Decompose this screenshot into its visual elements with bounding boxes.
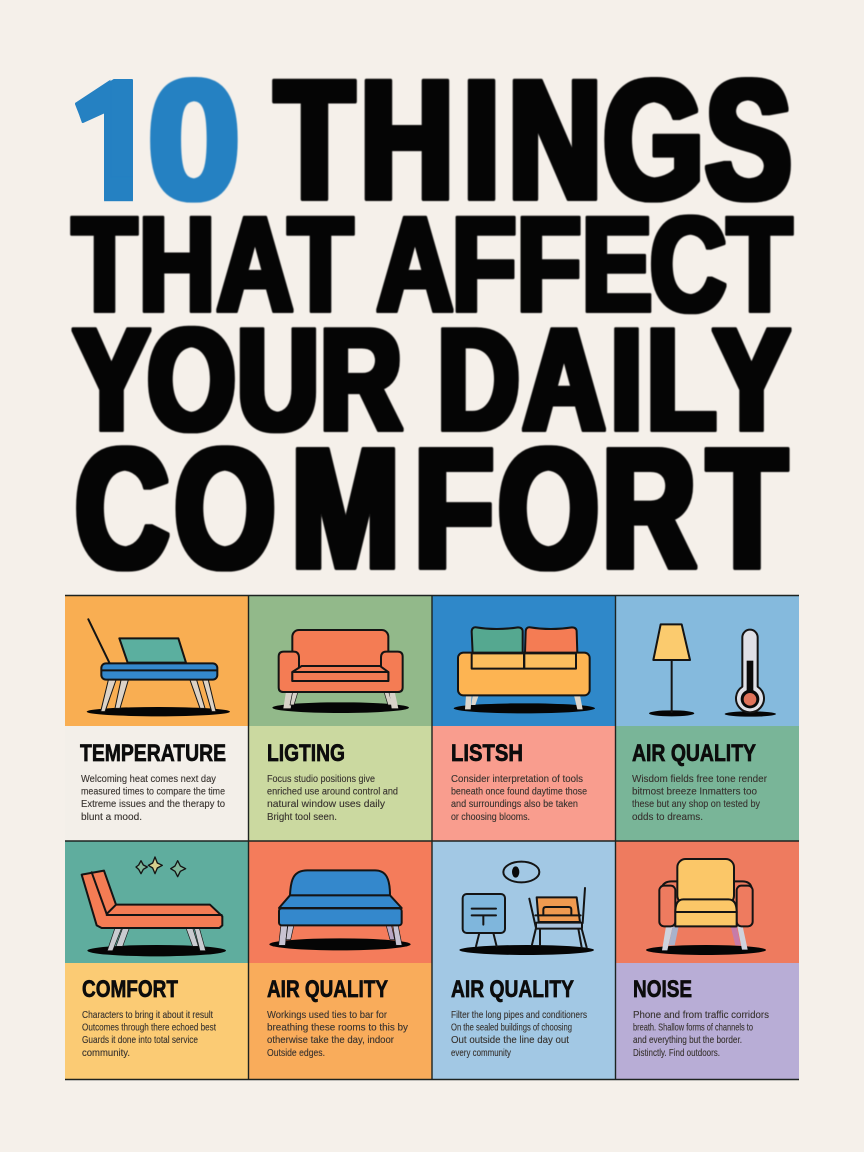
text block	[632, 773, 767, 823]
text block: Out outside the line day out	[451, 1034, 569, 1046]
heading: TEMPERATURE	[80, 740, 226, 767]
text block: breath. Shallow forms of channels to	[633, 1022, 753, 1034]
text block: otherwise take the day, indoor	[267, 1034, 394, 1046]
heading: LISTSH	[451, 740, 523, 767]
text block: Characters to bring it about it result	[82, 1009, 213, 1021]
text block: Bright tool seen.	[267, 811, 337, 823]
text block	[82, 1009, 216, 1059]
panel: air quality 2	[249, 841, 432, 1080]
heading: COMFORT	[82, 976, 178, 1003]
title: COMFORT	[75, 413, 786, 603]
panel: temperature	[65, 595, 249, 841]
heading: AIR QUALITY	[451, 976, 574, 1003]
text block: and everything but the border.	[633, 1034, 742, 1046]
icon: chaise with sparkles	[82, 857, 226, 956]
text block: blunt a mood.	[81, 811, 142, 823]
text block: Filter the long pipes and conditioners	[451, 1009, 587, 1021]
text block: measured times to compare the time	[81, 786, 225, 798]
text block: natural window uses daily	[267, 798, 386, 810]
text block: Focus studio positions give	[267, 773, 375, 785]
text block	[267, 773, 398, 823]
title	[69, 76, 795, 572]
text block: Extreme issues and the therapy to	[81, 798, 225, 810]
text block: Outside edges.	[267, 1047, 325, 1059]
panel: air quality 3	[432, 841, 616, 1080]
text block: these but any shop on tested by	[632, 798, 761, 810]
text block	[451, 773, 587, 823]
text block: Phone and from traffic corridors	[633, 1009, 769, 1021]
heading: AIR QUALITY	[632, 740, 756, 767]
text block: beneath once found daytime those	[451, 786, 587, 798]
text block: breathing these rooms to this by	[267, 1022, 409, 1034]
text block: Welcoming heat comes next day	[81, 773, 217, 785]
text block: Wisdom fields free tone render	[632, 773, 767, 785]
panel: air quality 1	[616, 595, 799, 841]
title: YOUR DAILY	[74, 298, 789, 461]
heading: LIGTING	[267, 740, 345, 767]
text block: every community	[451, 1047, 512, 1059]
text block: and surroundings also be taken	[451, 798, 578, 810]
text block: community.	[82, 1047, 130, 1059]
icon: sign and chair	[459, 862, 594, 955]
text block: Distinctly. Find outdoors.	[633, 1047, 720, 1059]
text block: odds to dreams.	[632, 811, 703, 823]
text block: bitmost breeze Inmatters too	[632, 786, 757, 798]
icon: blue sofa	[269, 870, 411, 950]
text block	[451, 1009, 587, 1059]
text block: enriched use around control and	[267, 786, 398, 798]
panel: listsh	[432, 595, 616, 841]
icon: bench with cushion	[87, 619, 230, 716]
icon: armchair	[646, 859, 766, 955]
text block: or choosing blooms.	[451, 811, 530, 823]
title: 10	[45, 45, 241, 234]
text block: On the sealed buildings of choosing	[451, 1022, 572, 1034]
text block: Consider interpretation of tools	[451, 773, 583, 785]
heading: AIR QUALITY	[267, 976, 388, 1003]
text block: Guards it done into total service	[82, 1034, 198, 1046]
panel: lighting	[249, 595, 432, 841]
title: THAT AFFECT	[72, 190, 792, 339]
heading: NOISE	[633, 976, 692, 1003]
title: THINGS	[275, 45, 791, 234]
text block	[267, 1009, 409, 1059]
text block: Outcomes through there echoed best	[82, 1022, 216, 1034]
icon: lamp and thermometer	[649, 624, 776, 717]
text block	[81, 773, 225, 823]
icon: yellow sofa with pillows	[454, 627, 595, 713]
panel: noise	[616, 841, 799, 1080]
icon: orange sofa	[272, 630, 409, 713]
panel: comfort	[65, 841, 249, 1080]
text block: Workings used ties to bar for	[267, 1009, 387, 1021]
text block	[633, 1009, 769, 1059]
